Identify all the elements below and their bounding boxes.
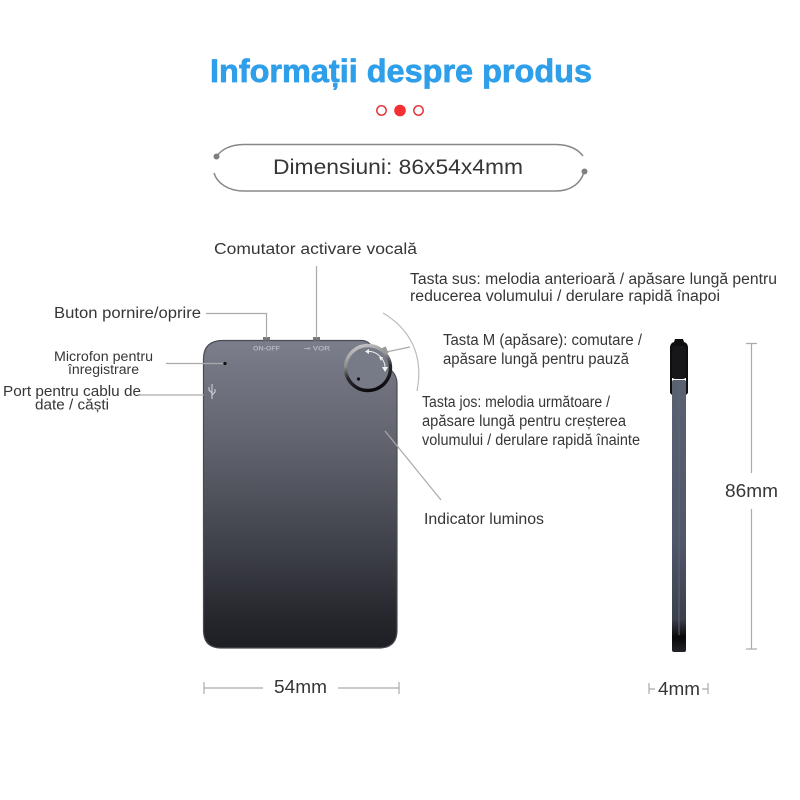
vor label: ⊸ VOR: [304, 346, 330, 352]
dimension: 4mm: 4mm: [658, 679, 700, 699]
dimensions badge: Dimensiuni: 86x54x4mm: [273, 155, 523, 179]
microphone hole: [223, 362, 227, 365]
label: m key: [443, 332, 643, 368]
label: up key: [410, 271, 777, 305]
label: microphone: Microfon pentru: [54, 349, 153, 364]
device body: [204, 340, 397, 648]
dial: [346, 346, 390, 390]
label: power button: Buton pornire/oprire: [54, 305, 201, 322]
icon: usb: [209, 384, 215, 399]
label: down key: apăsare lungă pentru creșterea: [422, 413, 626, 430]
dimension: 86mm: 86mm: [725, 481, 778, 501]
label: light indicator: Indicator luminos: [424, 511, 544, 528]
device front view: [204, 337, 397, 648]
label: data port: Port pentru cablu de: [3, 384, 141, 400]
voice switch: [313, 337, 320, 340]
label: microphone: [54, 349, 223, 377]
label: down key: volumului / derulare rapidă înainte: [422, 432, 640, 449]
label: down key: [422, 394, 640, 449]
label: power button: [54, 305, 266, 338]
dimension: 4mm: [649, 679, 708, 699]
label: down key: Tasta jos: melodia următoare /: [422, 394, 611, 411]
device side view: [670, 339, 688, 652]
title: Informații despre produs: [210, 53, 592, 89]
dimension: 86mm: [725, 344, 778, 649]
label: light indicator: [385, 431, 544, 528]
label: up key: Tasta sus: melodia anterioară / apăsare lungă pentru: [410, 271, 777, 288]
on-off label: ON-OFF: [253, 346, 280, 352]
label: up key: reducerea volumului / derulare rapidă înapoi: [410, 288, 720, 305]
label: voice activation switch: Comutator activare vocală: [214, 241, 417, 258]
m key pointer: [382, 346, 410, 354]
label: m key: apăsare lungă pentru pauză: [443, 351, 629, 368]
dimensions badge: [214, 144, 588, 191]
dimension: 54mm: [204, 677, 399, 697]
bracket arc for keys: [383, 313, 419, 391]
power button: [263, 337, 270, 340]
label: data port: date / căști: [35, 398, 109, 414]
dimension: 54mm: 54mm: [274, 677, 327, 697]
label: microphone: înregistrare: [67, 362, 139, 377]
label: m key: Tasta M (apăsare): comutare /: [443, 332, 643, 349]
label: data port: [3, 384, 204, 414]
pagination dots: [377, 105, 423, 116]
